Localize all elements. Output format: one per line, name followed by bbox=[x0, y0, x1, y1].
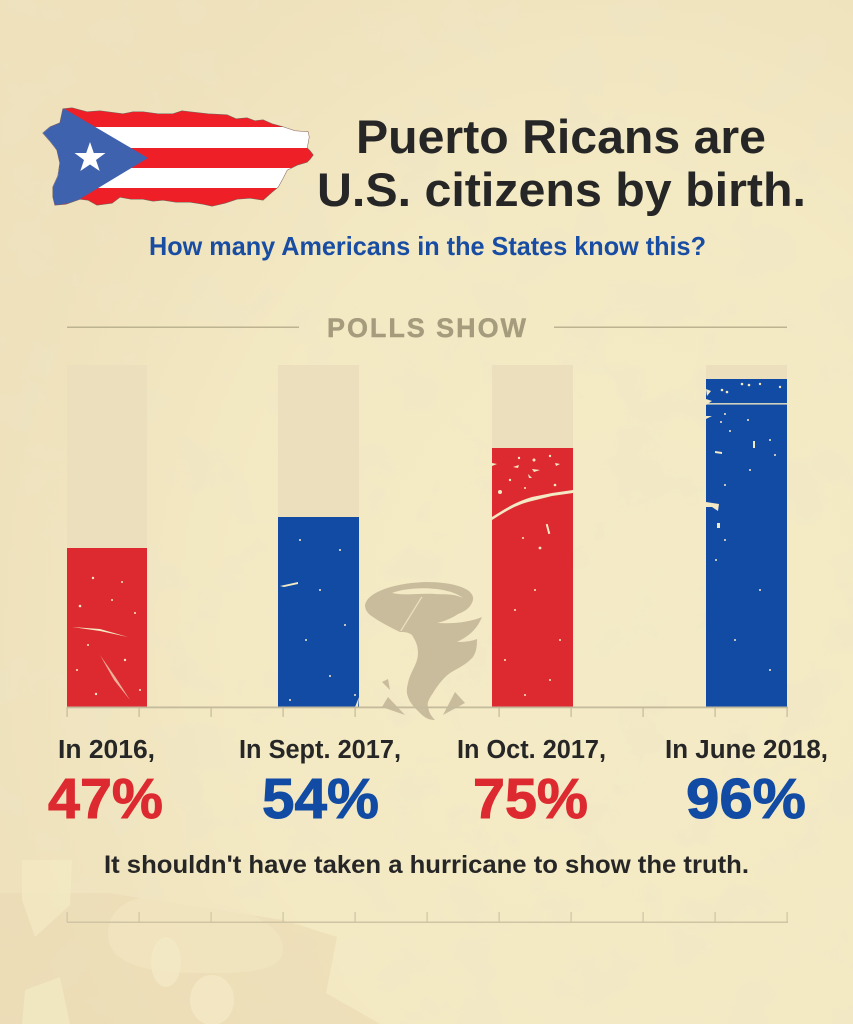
label: 2016: 47% bbox=[48, 767, 163, 831]
label: Sept. 2017 bbox=[239, 736, 401, 831]
label: Sept. 2017: 54% bbox=[262, 767, 379, 831]
bar: Oct. 2017, 75% bbox=[492, 365, 573, 707]
label: June 2018 bbox=[665, 736, 828, 831]
closing statement: It shouldn't have taken a hurricane to show the truth. bbox=[104, 851, 749, 879]
label: Oct. 2017: 75% bbox=[473, 767, 588, 831]
subtitle: How many Americans in the States know this? bbox=[149, 231, 706, 261]
bar: Sept. 2017, 54% bbox=[278, 365, 359, 707]
bar chart bbox=[67, 365, 787, 707]
title bbox=[317, 110, 806, 216]
icon: tornado bbox=[365, 582, 482, 720]
bar: 2016, 47% bbox=[67, 365, 147, 707]
title: Puerto Ricans are bbox=[356, 110, 766, 163]
footer ruler bbox=[66, 912, 788, 923]
bar: June 2018, 96% bbox=[706, 365, 787, 707]
label: June 2018: In June 2018, bbox=[665, 736, 828, 764]
flag-shaped map of Puerto Rico bbox=[40, 104, 316, 208]
heading: polls show: POLLS SHOW bbox=[327, 313, 527, 343]
label: Sept. 2017: In Sept. 2017, bbox=[239, 736, 401, 764]
label: 2016 bbox=[48, 736, 163, 831]
label: Oct. 2017 bbox=[457, 736, 606, 831]
label: Oct. 2017: In Oct. 2017, bbox=[457, 736, 606, 764]
chart axis with ticks bbox=[66, 706, 788, 717]
title: U.S. citizens by birth. bbox=[317, 163, 806, 216]
label: June 2018: 96% bbox=[686, 767, 806, 831]
label: 2016: In 2016, bbox=[58, 736, 155, 764]
